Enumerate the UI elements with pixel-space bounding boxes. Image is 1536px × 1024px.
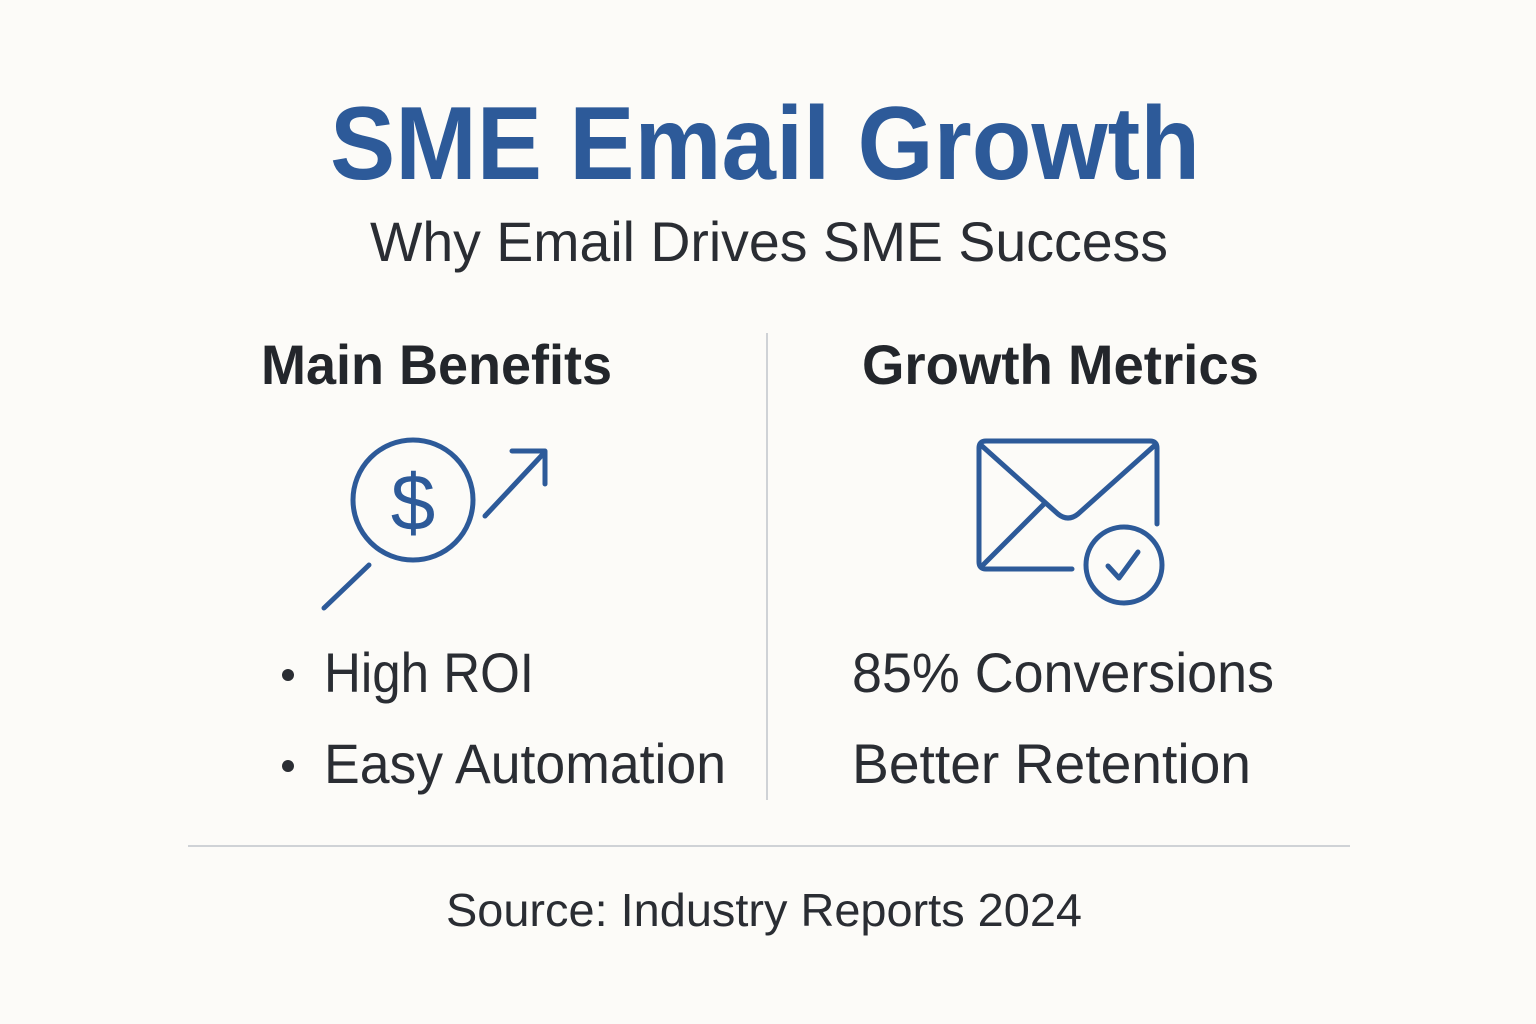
heading: growth metrics: Growth Metrics bbox=[862, 333, 1259, 396]
icon: dollar growth bbox=[324, 440, 545, 608]
panel: main benefits bbox=[261, 333, 726, 795]
bullet list: benefits: High ROI bbox=[324, 641, 534, 704]
icon: dollar growth: $ bbox=[391, 458, 435, 547]
bullet list: benefits bbox=[282, 641, 726, 795]
heading: main benefits: Main Benefits bbox=[261, 333, 612, 396]
panel: growth metrics bbox=[852, 333, 1274, 795]
title: SME Email Growth bbox=[330, 86, 1200, 202]
metrics text: 85% Conversions bbox=[852, 641, 1274, 704]
bullet list: benefits: Easy Automation bbox=[324, 732, 726, 795]
metrics text: Better Retention bbox=[852, 732, 1251, 795]
metrics text bbox=[852, 641, 1274, 795]
source footer: Source: Industry Reports 2024 bbox=[446, 884, 1082, 936]
subtitle: Why Email Drives SME Success bbox=[370, 210, 1168, 273]
icon: envelope with check bbox=[979, 441, 1162, 603]
